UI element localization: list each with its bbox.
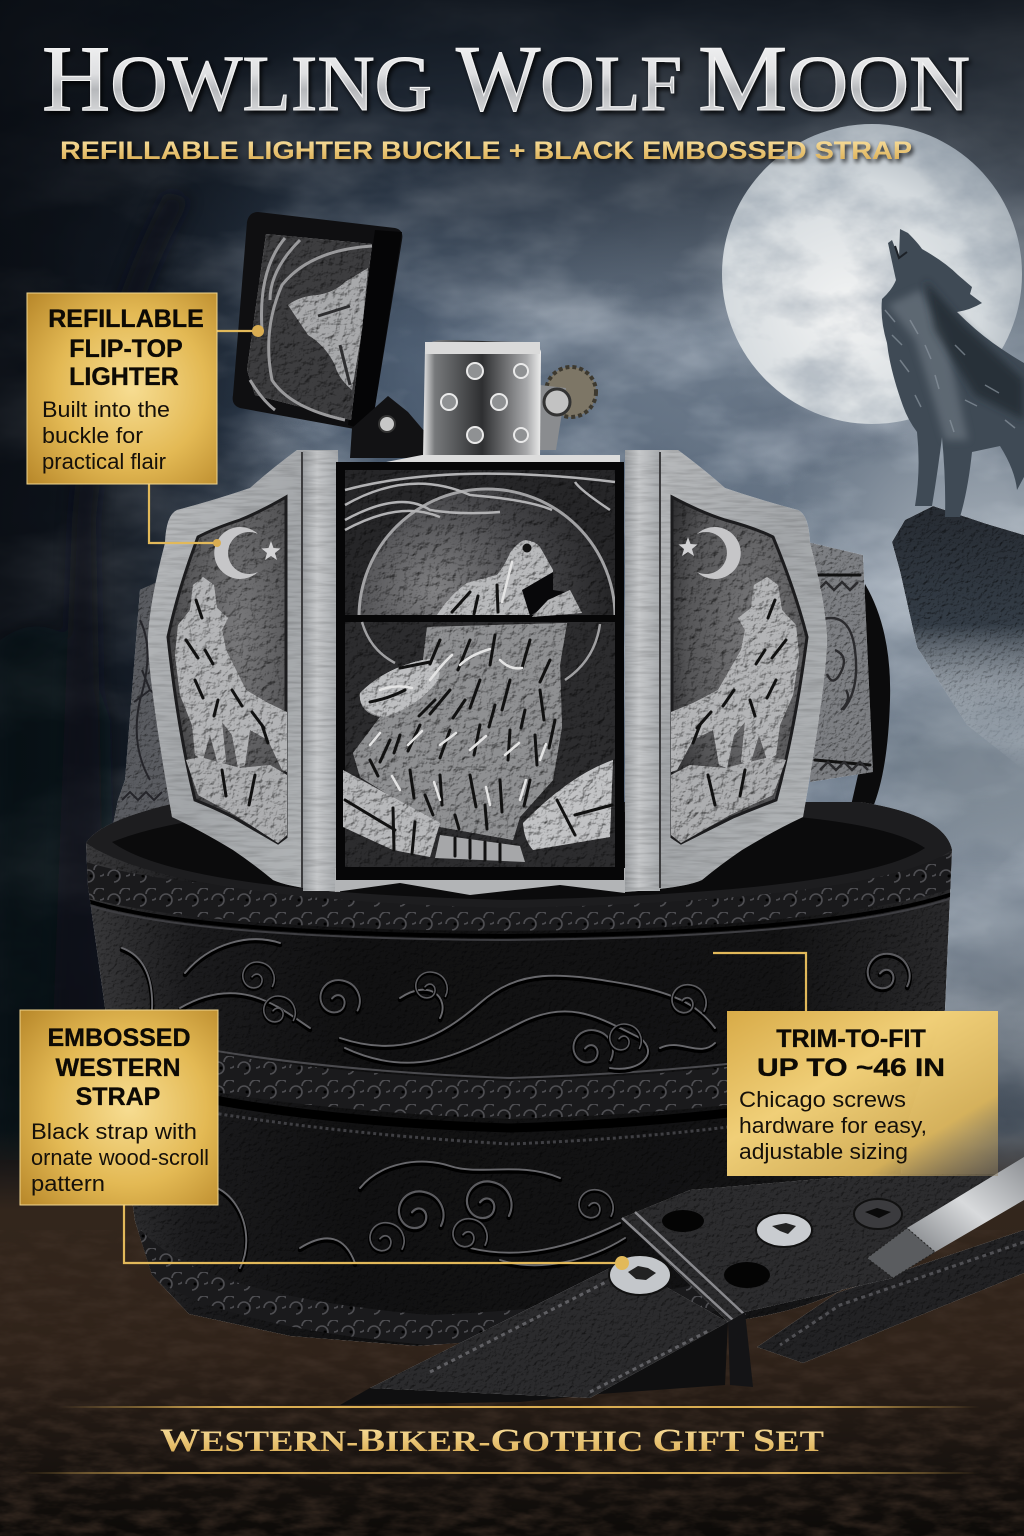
lighter chimney and wheel bbox=[345, 340, 620, 470]
left feather bbox=[343, 770, 440, 857]
lighter flip-top lid bbox=[233, 212, 402, 432]
arrow: leader line strap bbox=[124, 1205, 629, 1270]
moon bbox=[694, 96, 1024, 452]
right wing bbox=[625, 450, 827, 892]
callout: trim-to-fit: UP TO ~46 IN bbox=[757, 1054, 945, 1082]
callout: refillable flip-top lighter bbox=[27, 293, 217, 484]
front strap bbox=[340, 1262, 728, 1405]
lower plate bbox=[345, 622, 615, 867]
subtitle: REFILLABLE LIGHTER BUCKLE + BLACK EMBOSSED STRAP bbox=[60, 137, 912, 165]
crescent and star bbox=[697, 527, 741, 579]
strap holes bbox=[662, 1210, 704, 1232]
upper strap end bbox=[622, 1165, 1024, 1322]
callout: trim-to-fit: TRIM-TO-FIT bbox=[776, 1025, 926, 1053]
dark screw bbox=[854, 1199, 902, 1229]
right inner panel with crescent and wolf bbox=[671, 497, 807, 843]
silver screw middle bbox=[756, 1213, 812, 1247]
callout: embossed western strap: ornate wood-scroll bbox=[31, 1145, 209, 1170]
callout: embossed western strap: WESTERN bbox=[56, 1054, 180, 1082]
title: WOLF bbox=[456, 27, 682, 131]
scrollwork bbox=[122, 941, 715, 1270]
silver belt buckle bbox=[148, 450, 827, 895]
standing wolf bbox=[175, 577, 287, 772]
left inner panel with crescent and wolf bbox=[168, 497, 287, 843]
title: MOON bbox=[698, 27, 970, 131]
lighter body with wolf head relief bbox=[336, 462, 624, 880]
footer banner: WESTERN- BIKER- GOTHIC GIFT SET bbox=[160, 1423, 824, 1459]
callout: refillable flip-top lighter: REFILLABLE bbox=[48, 305, 204, 333]
howling wolf silhouette bbox=[882, 229, 1024, 517]
callout: refillable flip-top lighter: FLIP-TOP bbox=[69, 335, 183, 363]
standing wolf bbox=[671, 577, 799, 772]
raised snout bbox=[437, 540, 582, 617]
wolf on rock bbox=[875, 229, 1024, 840]
rock cliff bbox=[892, 506, 1024, 770]
title: HOWLING bbox=[42, 27, 432, 131]
coil rim and interior bbox=[86, 802, 952, 908]
callout: trim-to-fit: hardware for easy, bbox=[739, 1113, 927, 1138]
wolf head on lid bbox=[288, 268, 368, 390]
callout: trim-to-fit bbox=[727, 1011, 998, 1176]
background: dark forest trees bbox=[0, 190, 190, 1160]
upper plate bbox=[344, 470, 616, 615]
callout: trim-to-fit: adjustable sizing bbox=[739, 1139, 908, 1164]
arrow: leader line trim bbox=[713, 953, 806, 1011]
crescent and star bbox=[214, 527, 258, 579]
top ornamental band bbox=[80, 868, 960, 914]
rocks bbox=[186, 757, 287, 843]
fog below the rock bbox=[875, 700, 1024, 840]
callout: trim-to-fit: Chicago screws bbox=[739, 1087, 906, 1112]
bottom ornamental band bbox=[130, 1240, 900, 1330]
callout: embossed western strap bbox=[20, 1010, 218, 1205]
right feather bbox=[523, 760, 613, 850]
rocks bbox=[671, 757, 786, 843]
striker wheel bbox=[546, 367, 596, 417]
title bbox=[42, 27, 970, 131]
belt: coiled embossed strap bbox=[80, 802, 960, 1346]
left wing bbox=[148, 450, 340, 892]
callout: embossed western strap: STRAP bbox=[76, 1083, 160, 1111]
fur mass bbox=[353, 623, 567, 840]
binding bbox=[435, 835, 525, 862]
callout: embossed western strap: Black strap with bbox=[31, 1119, 197, 1144]
belt: back strap loop behind buckle bbox=[112, 542, 890, 830]
callout: refillable flip-top lighter: Built into the bbox=[42, 397, 170, 422]
ground bbox=[0, 1130, 1024, 1536]
belt tail with Chicago screws bbox=[340, 1157, 1024, 1405]
middle ornamental band bbox=[218, 1056, 727, 1119]
callout: refillable flip-top lighter: buckle for bbox=[42, 423, 143, 448]
arrow: leader lines refillable bbox=[149, 325, 264, 547]
frame bars bbox=[303, 451, 338, 891]
screwdriver bbox=[907, 1157, 1024, 1252]
lower strap bbox=[757, 1230, 1024, 1363]
callout: embossed western strap: pattern bbox=[31, 1171, 105, 1196]
bottom frame bbox=[335, 868, 625, 895]
callout: refillable flip-top lighter: LIGHTER bbox=[69, 363, 179, 391]
callout: embossed western strap: EMBOSSED bbox=[47, 1024, 191, 1052]
silver screw front bbox=[609, 1255, 671, 1295]
callout: refillable flip-top lighter: practical flair bbox=[42, 449, 166, 474]
